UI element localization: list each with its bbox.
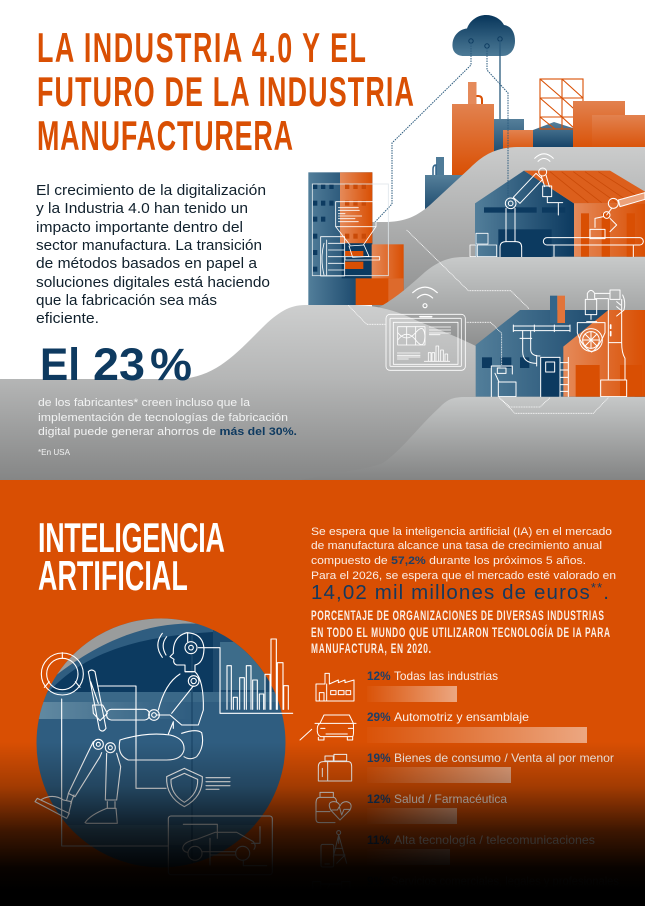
factory: middle building — [470, 154, 645, 258]
car diagram — [168, 816, 272, 875]
connector lines — [62, 648, 293, 846]
network line: cloud to robot — [487, 48, 508, 197]
stat description — [38, 397, 297, 438]
dark fade overlay at bottom — [0, 742, 645, 906]
factory: lower building — [476, 290, 645, 397]
steering column — [88, 670, 107, 731]
row: salud: Salud / Farmacéutica — [394, 792, 507, 806]
wifi signal and tablet dashboard — [348, 230, 608, 413]
big stat: 23% — [40, 339, 192, 390]
row: todas las industrias: 12% — [367, 669, 391, 683]
row: bienes de consumo: 19% — [367, 751, 391, 765]
machine — [491, 366, 516, 397]
title: FUTURO DE LA INDUSTRIA — [37, 69, 414, 116]
grey hill: middle — [355, 257, 645, 400]
door and ladder — [541, 357, 568, 397]
icon: cloud — [452, 15, 515, 56]
big figure: 14,02 mil millones de euros: ** — [591, 580, 602, 595]
title: MANUFACTURERA — [37, 113, 293, 160]
AI forecast text: de manufactura alcance una tasa de crecimiento anual — [311, 540, 602, 552]
row: todas las industrias — [316, 669, 498, 702]
steering wheel — [41, 653, 83, 695]
shield — [167, 768, 230, 807]
chart heading — [311, 609, 610, 657]
title — [37, 25, 414, 160]
row: bienes de consumo: Bienes de consumo / Venta al por menor — [394, 751, 614, 765]
wifi signal — [535, 154, 553, 161]
circle background with car interior — [36, 600, 290, 870]
row: servicios: 9% — [367, 874, 385, 888]
big stat: 23%: 23 — [93, 339, 145, 390]
intro paragraph: de métodos basados en papel a — [36, 256, 258, 272]
row: servicios — [313, 874, 619, 906]
dummy line art — [35, 633, 293, 875]
robot arm with turbine — [577, 290, 627, 397]
row: todas las industrias: Todas las industrias — [394, 669, 498, 683]
big stat: 23%: El — [40, 339, 80, 390]
heading: inteligencia artificial: ARTIFICIAL — [38, 553, 188, 600]
network line: cloud to left building — [375, 43, 471, 222]
factory: left building with server and document — [308, 172, 404, 305]
grey hill: front left — [0, 305, 645, 480]
row: alta tecnologia: Alta tecnología / telecomunicaciones — [394, 833, 595, 847]
row: alta tecnologia: 11% — [367, 833, 390, 847]
AI forecast text: Se espera que la inteligencia artificial (IA) en el mercado — [311, 526, 612, 538]
stat description: implementación de tecnologías de fabricación — [38, 412, 288, 424]
server rack and laptop — [321, 237, 380, 276]
row: automotriz: Automotriz y ensamblaje — [394, 710, 529, 724]
chart heading: MANUFACTURA, EN 2020. — [311, 642, 431, 657]
grey hill: back — [372, 147, 645, 335]
illustration: smart factory landscape — [0, 15, 645, 480]
intro paragraph: y la Industria 4.0 han tenido un — [36, 201, 248, 217]
pipes — [513, 325, 570, 366]
intro paragraph: impacto importante dentro del — [36, 220, 243, 236]
tablet — [386, 314, 465, 370]
torso and arm — [107, 672, 203, 734]
footnote: *En USA — [38, 447, 70, 457]
big stat: 23%: % — [150, 339, 192, 390]
heading: inteligencia artificial: INTELIGENCIA — [38, 515, 225, 562]
conveyor and robot arm right — [543, 193, 645, 257]
intro paragraph: eficiente. — [36, 311, 99, 327]
AI forecast text: compuesto de 57,2% durante los próximos 5 años. — [311, 555, 586, 567]
intro paragraph — [36, 183, 270, 327]
bar chart: industries — [300, 669, 619, 906]
head — [158, 633, 204, 672]
grey hill: front right — [300, 397, 645, 480]
row: alta tecnologia — [321, 831, 595, 867]
seat and thigh — [119, 731, 203, 760]
boxes — [470, 233, 497, 257]
legs — [35, 739, 121, 823]
intro paragraph: que la fabricación sea más — [36, 293, 217, 309]
robot arm left — [500, 168, 563, 257]
row: servicios: Servicios comerciales, legales y profesionales — [391, 874, 619, 888]
AI forecast text — [311, 526, 616, 582]
back buildings — [425, 79, 645, 220]
chart heading: EN TODO EL MUNDO QUE UTILIZARON TECNOLOGÍA DE IA PARA — [311, 625, 610, 641]
heading: inteligencia artificial — [38, 515, 225, 600]
intro paragraph: sector manufactura. La transición — [36, 238, 262, 254]
dotted connectors — [348, 230, 608, 413]
AI forecast text: Para el 2026, se espera que el mercado esté valorado en — [311, 570, 616, 582]
panel: inteligencia artificial — [0, 480, 645, 906]
big figure: 14,02 mil millones de euros: 14,02 mil millones de euros — [311, 581, 590, 604]
document screen and funnel — [336, 202, 376, 245]
row: bienes de consumo — [318, 751, 614, 783]
row: automotriz: 29% — [367, 710, 391, 724]
stat description: de los fabricantes* creen incluso que la — [38, 397, 251, 409]
row: salud: 12% — [367, 792, 391, 806]
stat description: digital puede generar ahorros de más del 30%. — [38, 426, 297, 438]
network line: cloud to back building — [499, 41, 501, 119]
illustration: crash test dummy in circle — [35, 600, 293, 875]
intro paragraph: soluciones digitales está haciendo — [36, 275, 270, 291]
page background: white upper section — [0, 0, 645, 480]
big figure: 14,02 mil millones de euros: . — [603, 581, 609, 604]
row: salud — [316, 792, 507, 824]
bar chart — [227, 639, 288, 709]
chart heading: PORCENTAJE DE ORGANIZACIONES DE DIVERSAS INDUSTRIAS — [311, 609, 604, 624]
intro paragraph: El crecimiento de la digitalización — [36, 183, 266, 199]
row: automotriz — [300, 710, 587, 743]
title: LA INDUSTRIA 4.0 Y EL — [37, 25, 366, 72]
